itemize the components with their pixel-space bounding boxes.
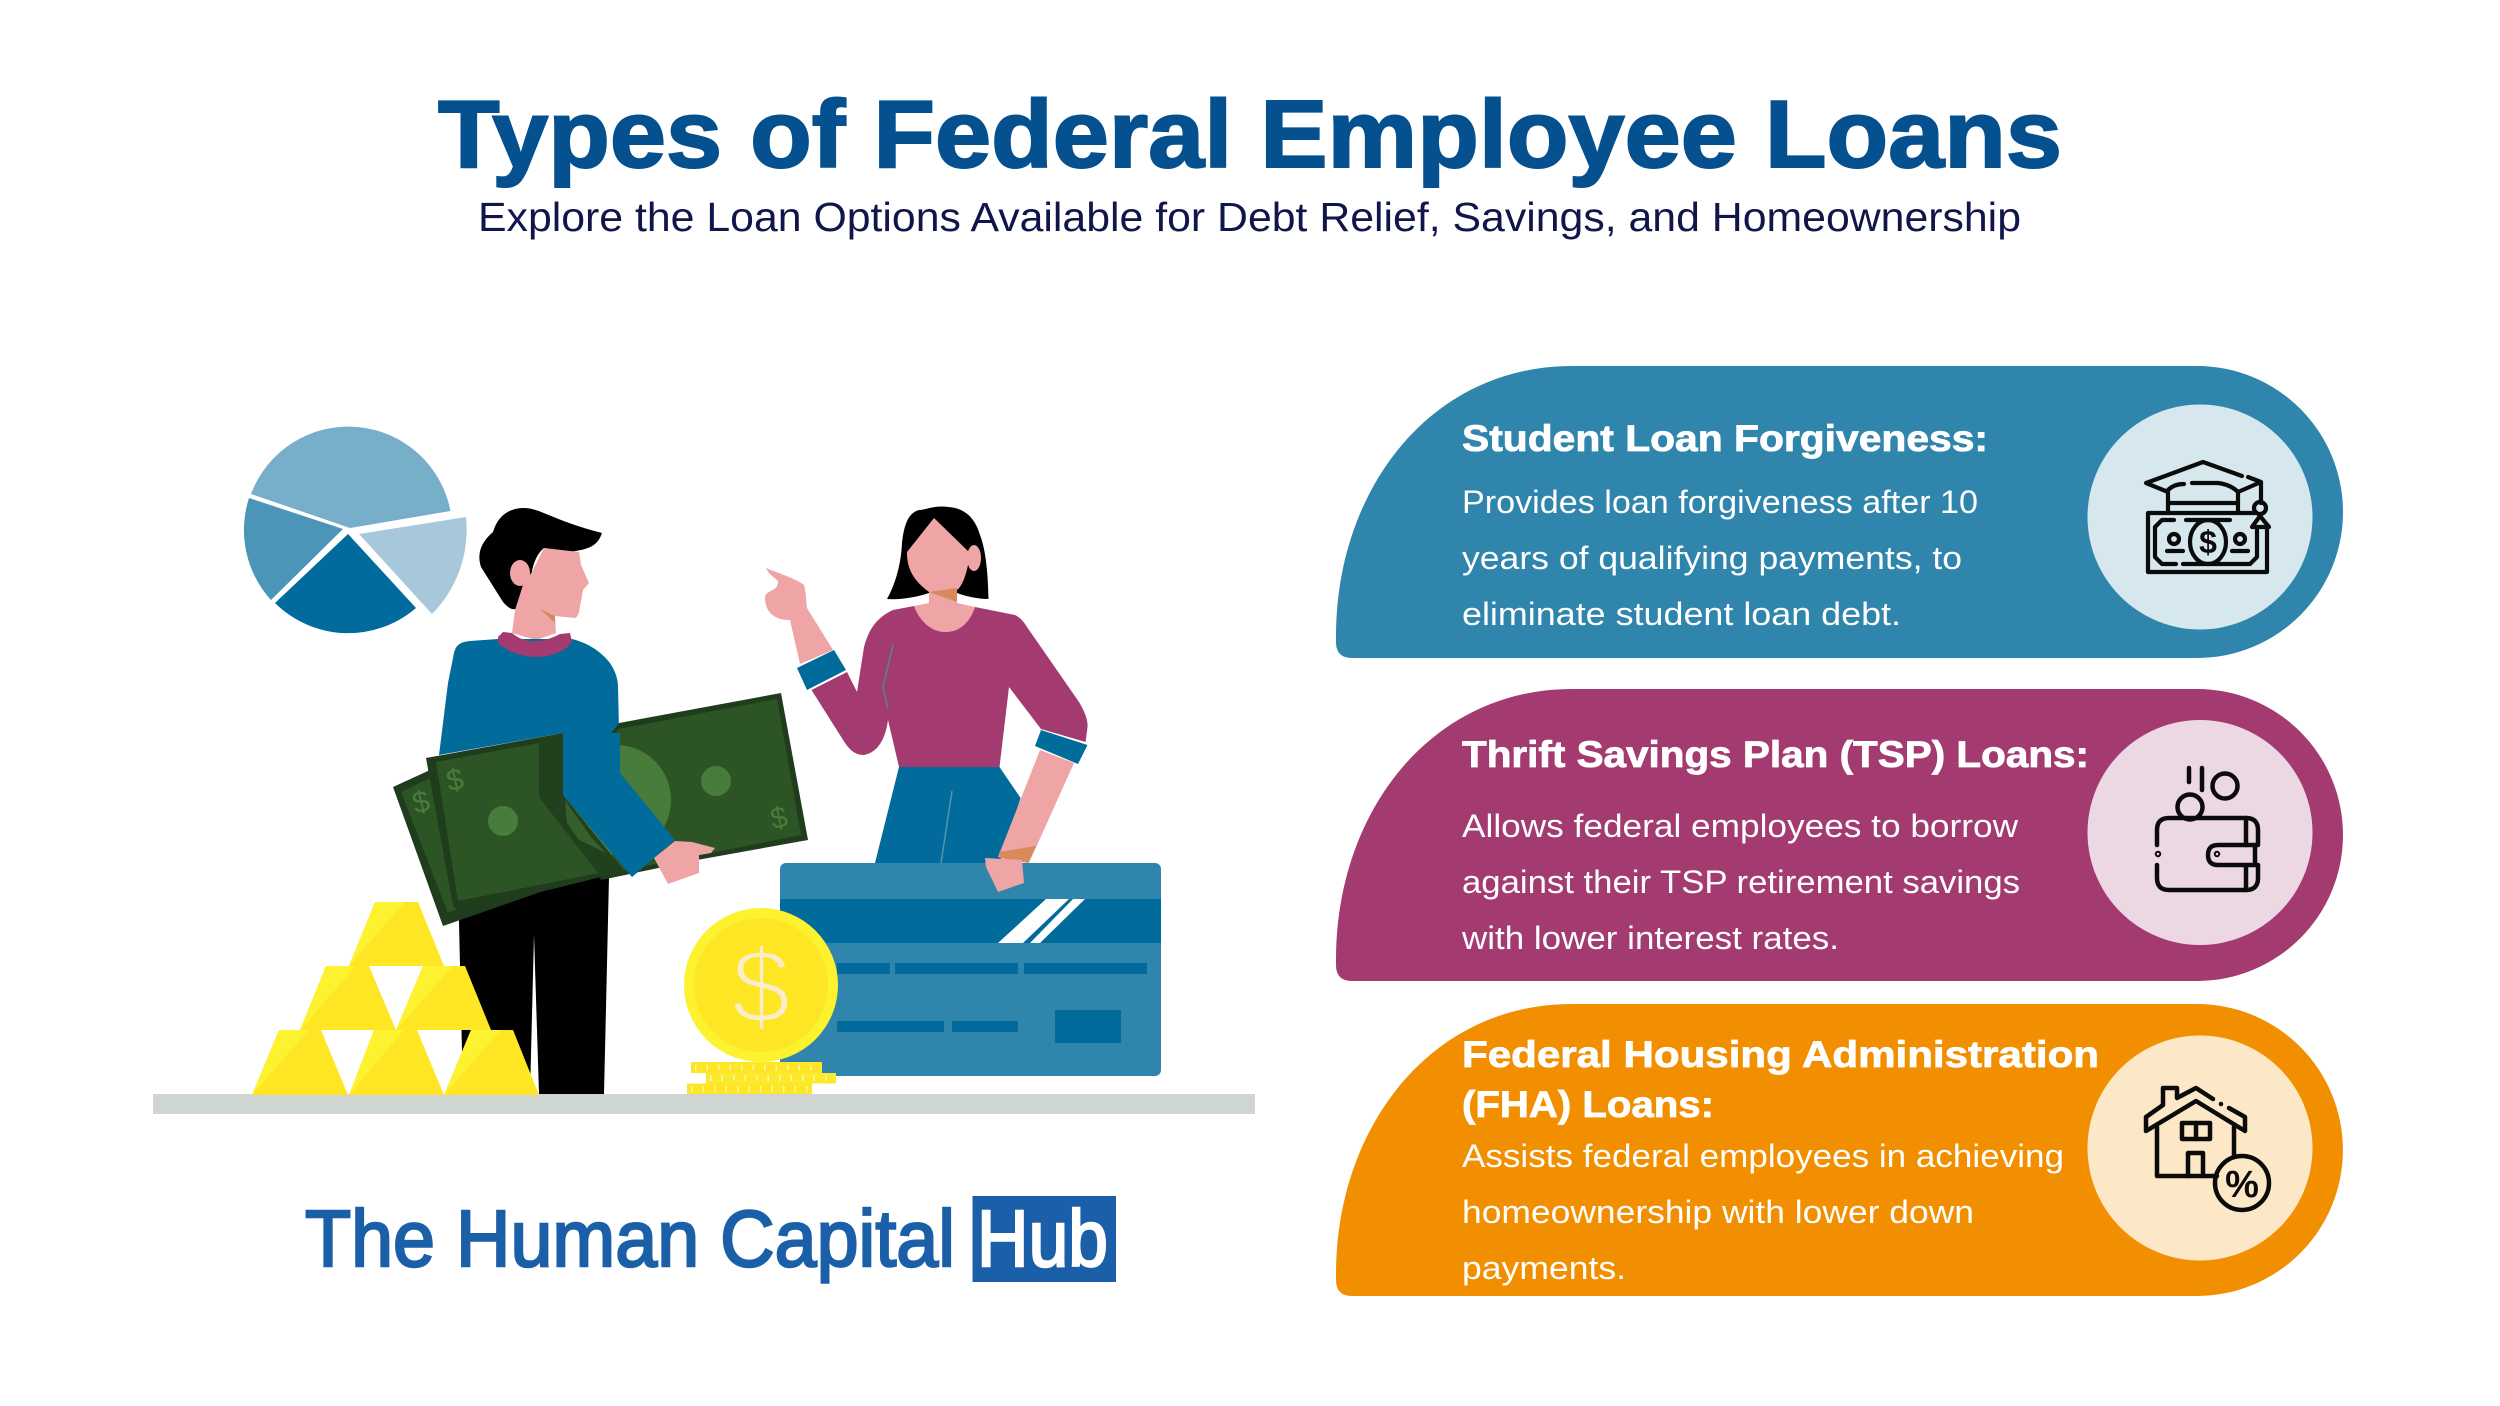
- heading: Thrift Savings Plan (TSP) Loans:: [1462, 734, 2089, 775]
- logo hub word: Hub: [977, 1194, 1108, 1283]
- logo wordmark: The Human Capital: [305, 1194, 955, 1283]
- card background: [1336, 1004, 2343, 1296]
- money bills: [393, 693, 808, 926]
- icon: graduation cap and banknote: [2146, 462, 2269, 572]
- panel: federal housing administration loans: [1336, 1004, 2343, 1296]
- icon: wallet and coins: [2157, 768, 2258, 890]
- icon: house with percent badge: [2146, 1088, 2269, 1210]
- heading: Federal Housing Administration: [1462, 1034, 2099, 1075]
- body text: with lower interest rates.: [1461, 920, 1839, 956]
- body text: eliminate student loan debt.: [1462, 596, 1901, 632]
- heading: [1462, 1034, 2099, 1125]
- icon: graduation cap and banknote: $: [2199, 524, 2217, 560]
- ground: [153, 1094, 1255, 1114]
- icon circle: [2088, 1036, 2312, 1260]
- body text: Provides loan forgiveness after 10: [1462, 484, 1978, 520]
- body text: [1461, 808, 2020, 956]
- gold coin with dollar sign: [684, 908, 838, 1094]
- icon: house with percent badge: %: [2225, 1164, 2259, 1206]
- body text: [1462, 1138, 2064, 1286]
- woman: [765, 507, 1088, 892]
- man: [439, 508, 675, 1094]
- heading: (FHA) Loans:: [1462, 1084, 1714, 1125]
- money bills: $: [444, 763, 467, 798]
- money bills: $: [409, 784, 434, 821]
- icon circle: [2088, 404, 2312, 630]
- logo: [305, 1194, 1116, 1283]
- card background: [1336, 689, 2343, 981]
- body text: Assists federal employees in achieving: [1462, 1138, 2064, 1174]
- icon circle: [2088, 720, 2312, 945]
- illustration: people with money, gold and credit card: [153, 427, 1255, 1114]
- panel: thrift savings plan loans: [1336, 689, 2343, 981]
- body text: [1462, 484, 1978, 632]
- panel: student loan forgiveness: [1336, 366, 2343, 658]
- gold bars: [252, 902, 539, 1095]
- money bills: $: [768, 801, 791, 836]
- body text: payments.: [1462, 1250, 1626, 1286]
- logo box: [972, 1196, 1116, 1282]
- body text: against their TSP retirement savings: [1462, 864, 2020, 900]
- gold coin with dollar sign: $: [732, 928, 790, 1046]
- credit card: [780, 863, 1161, 1076]
- body text: years of qualifying payments, to: [1462, 540, 1962, 576]
- subtitle: Explore the Loan Options Available for Debt Relief, Savings, and Homeownership: [478, 194, 2021, 240]
- heading: Student Loan Forgiveness:: [1462, 418, 1988, 459]
- body text: Allows federal employees to borrow: [1462, 808, 2019, 844]
- card background: [1336, 366, 2343, 658]
- pie chart: [244, 427, 467, 633]
- title: Types of Federal Employee Loans: [438, 81, 2062, 188]
- body text: homeownership with lower down: [1462, 1194, 1974, 1230]
